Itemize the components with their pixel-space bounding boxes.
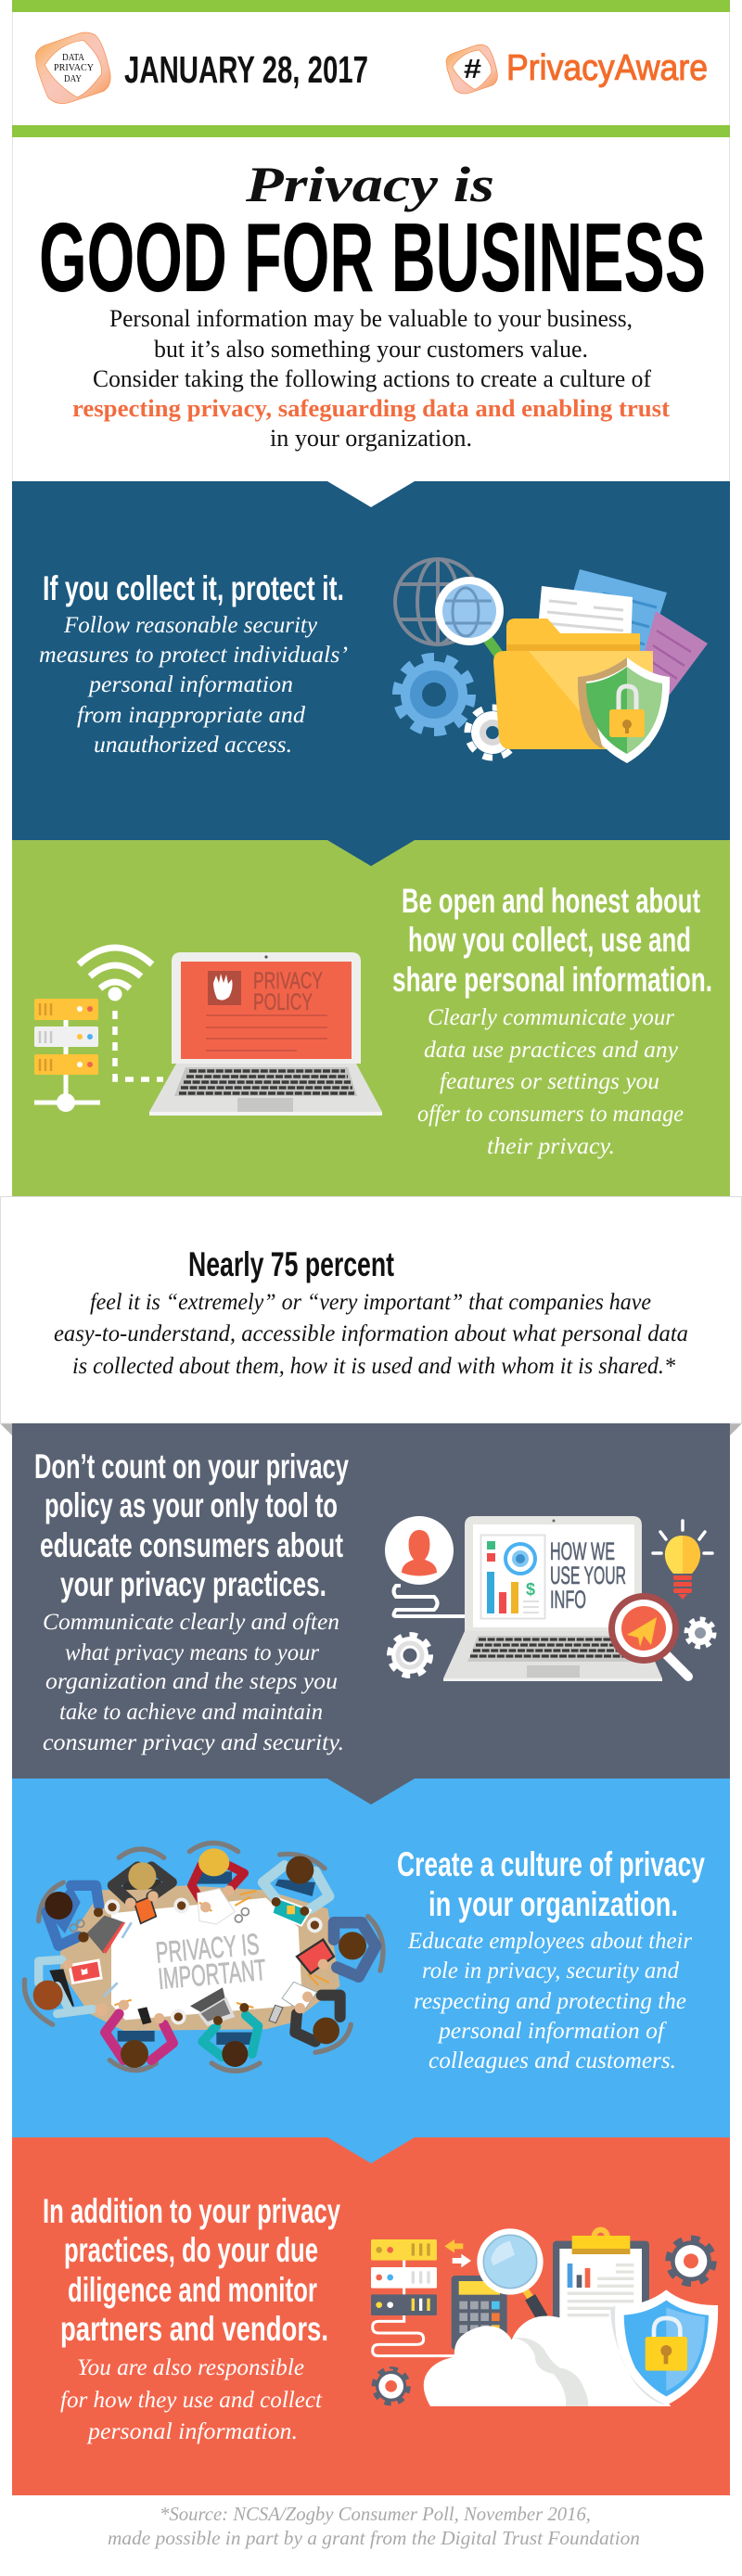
illustration: servers, cloud and shield: [371, 2227, 718, 2406]
clipboard: [553, 2227, 649, 2341]
table label: PRIVACY IS: [154, 1927, 261, 1970]
body text: personal information.: [86, 2419, 298, 2444]
illustration: meeting table: [24, 1843, 383, 2071]
heading: partners and vendors.: [60, 2310, 328, 2348]
panel: educate consumers: [12, 1423, 730, 1779]
body text: take to achieve and maintain: [59, 1700, 323, 1725]
cloud: [424, 2316, 671, 2406]
body text: Clearly communicate your: [428, 1005, 674, 1030]
body text: Follow reasonable security: [63, 613, 318, 638]
intro text: but it’s also something your customers value.: [154, 336, 588, 363]
icon: laptop privacy policy: POLICY: [253, 989, 313, 1015]
body text: personal information: [87, 672, 293, 697]
body text: [60, 2355, 323, 2444]
date: JANUARY 28, 2017: [124, 48, 368, 91]
body text: Communicate clearly and often: [43, 1610, 339, 1635]
icon: laptop how we use your info: USE YOUR: [550, 1562, 626, 1589]
heading: policy as your only tool to: [45, 1486, 338, 1524]
panel: culture of privacy: [12, 1779, 730, 2137]
body text: organization and the steps you: [45, 1669, 338, 1694]
body text: offer to consumers to manage: [417, 1102, 684, 1127]
body text: [407, 1929, 692, 2073]
panel: partners and vendors: [12, 2137, 730, 2495]
title: [39, 157, 706, 312]
heading: practices, do your due: [64, 2231, 318, 2269]
heading: your privacy practices.: [60, 1565, 326, 1603]
panel: survey callout: [0, 1196, 742, 1435]
gears: [374, 2238, 714, 2404]
magnifier: [477, 2228, 544, 2318]
intro text: in your organization.: [270, 425, 472, 452]
icon: wifi and servers: [34, 948, 163, 1112]
icon: laptop how we use your info: $: [526, 1580, 535, 1599]
icon: laptop how we use your info: [443, 1516, 688, 1681]
heading: If you collect it, protect it.: [43, 569, 344, 607]
intro text: Personal information may be valuable to your business,: [109, 305, 633, 332]
body text: data use practices and any: [424, 1038, 679, 1063]
body text: [43, 1610, 344, 1755]
body text: Educate employees about their: [407, 1929, 692, 1954]
heading: educate consumers about: [40, 1526, 343, 1564]
body text: feel it is “extremely” or “very important” that companies have: [90, 1290, 651, 1315]
body text: unauthorized access.: [94, 733, 292, 758]
intro text: Consider taking the following actions to create a culture of: [93, 365, 651, 392]
body text: You are also responsible: [77, 2355, 304, 2380]
body text: personal information of: [437, 2019, 667, 2044]
logo: Data Privacy Day: PRIVACY: [54, 62, 94, 73]
panel: protect: [12, 481, 730, 840]
heading: In addition to your privacy: [43, 2192, 340, 2230]
source note: *Source: NCSA/Zogby Consumer Poll, November 2016,: [160, 2503, 591, 2525]
body text: respecting and protecting the: [414, 1989, 686, 2014]
body text: is collected about them, how it is used and with whom it is shared.*: [72, 1354, 675, 1379]
source note: [108, 2503, 640, 2549]
header band: [12, 0, 730, 137]
shield: [610, 2289, 718, 2405]
body text: features or settings you: [440, 1069, 659, 1094]
icon: laptop privacy policy: PRIVACY: [253, 968, 323, 994]
body text: measures to protect individuals’: [39, 643, 348, 668]
table label: [154, 1927, 267, 1996]
icon: laptop how we use your info: INFO: [550, 1586, 586, 1613]
body text: for how they use and collect: [60, 2388, 323, 2413]
icon: laptop how we use your info: HOW WE: [550, 1537, 615, 1565]
body text: [39, 613, 348, 758]
wordmark: PrivacyAware: [506, 48, 708, 88]
body text: colleagues and customers.: [429, 2048, 676, 2073]
heading: Don’t count on your privacy: [34, 1447, 349, 1486]
heading: [34, 1447, 349, 1603]
icon: person: [385, 1516, 466, 1616]
body text: from inappropriate and: [77, 703, 306, 728]
logo: Data Privacy Day: DAY: [64, 73, 82, 84]
calculator: [452, 2276, 507, 2350]
icon: gears: [390, 1619, 714, 1676]
body text: their privacy.: [487, 1134, 615, 1159]
icon: folder, globe and shield: [395, 559, 708, 763]
heading: [397, 1845, 705, 1923]
body text: what privacy means to your: [65, 1640, 319, 1665]
logo: hash: #: [464, 55, 481, 84]
heading: [43, 2192, 340, 2348]
body text: consumer privacy and security.: [43, 1730, 344, 1755]
logo: hash: [446, 45, 497, 94]
intro text: respecting privacy, safeguarding data and enabling trust: [72, 395, 670, 422]
body text: role in privacy, security and: [422, 1958, 679, 1983]
body text: [54, 1290, 688, 1379]
icon: laptop privacy policy: [149, 952, 382, 1116]
intro text: [72, 305, 670, 452]
source note: made possible in part by a grant from the Digital Trust Foundation: [108, 2527, 640, 2549]
table label: IMPORTANT: [157, 1953, 267, 1996]
servers and wire: [371, 2239, 471, 2356]
logo: Data Privacy Day: DATA: [62, 52, 84, 63]
heading: diligence and monitor: [68, 2271, 317, 2309]
panel: open and honest: [12, 840, 730, 1196]
icon: light bulb: [653, 1521, 712, 1600]
heading: [392, 882, 712, 999]
body text: [417, 1005, 684, 1159]
title: Privacy is: [245, 157, 494, 212]
body text: easy-to-understand, accessible information about what personal data: [54, 1321, 688, 1346]
logo: Data Privacy Day: [35, 32, 110, 104]
heading: Nearly 75 percent: [188, 1245, 394, 1283]
